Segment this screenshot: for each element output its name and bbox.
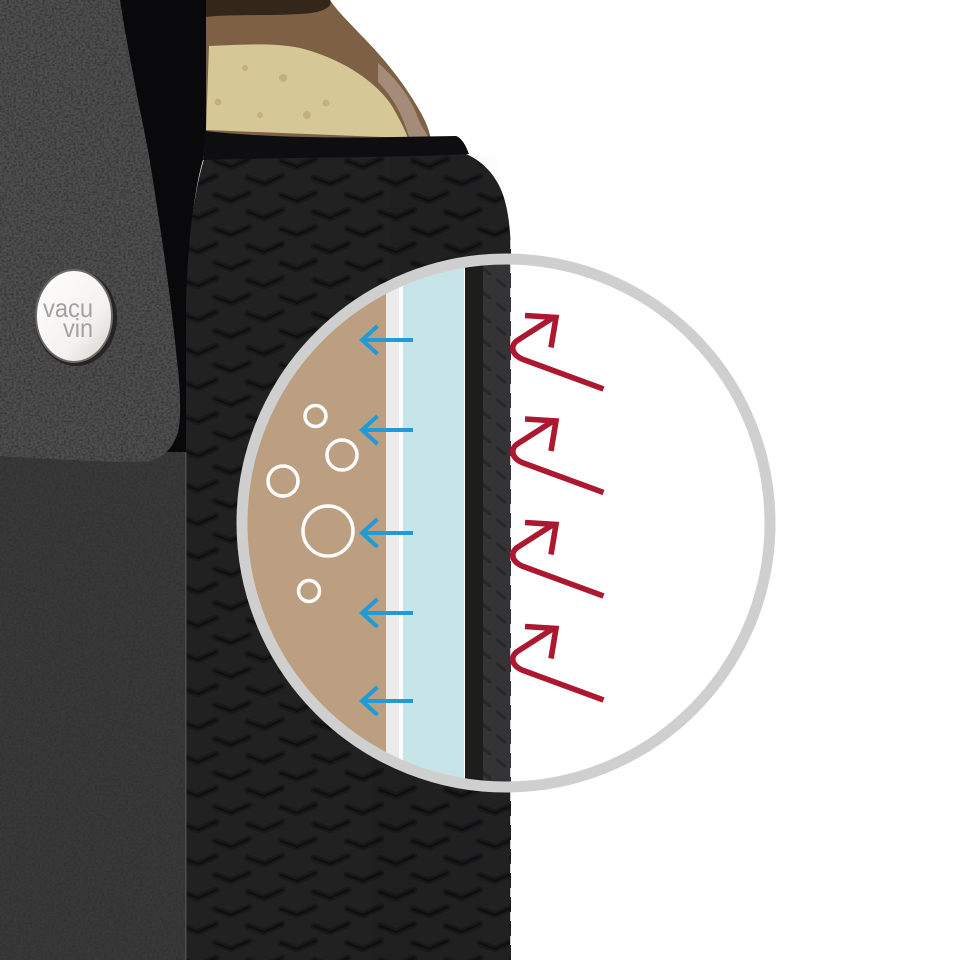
layer: glass	[386, 288, 399, 758]
rivet shadow	[35, 270, 117, 366]
layer: neoprene	[483, 250, 511, 810]
sleeve left shadow	[186, 156, 511, 960]
bubble 4	[303, 506, 353, 556]
bottle highlight	[378, 63, 428, 137]
bottle glass	[205, 0, 431, 140]
rivet logo: vin	[63, 313, 93, 343]
red arrow 1	[513, 316, 604, 389]
bubble 2	[327, 440, 357, 470]
blue arrow 5	[362, 687, 413, 715]
red arrow 2	[513, 419, 604, 492]
blue arrow 2	[362, 416, 413, 444]
lens white background	[399, 268, 465, 778]
magnifier lens	[230, 240, 790, 960]
bubble 5	[298, 580, 320, 602]
blue cold arrows	[362, 326, 413, 715]
leather flap	[0, 0, 190, 470]
lower bag panel	[0, 452, 186, 960]
red arrow 3	[513, 522, 604, 596]
blue arrow 1	[362, 326, 413, 354]
lens ring	[242, 259, 770, 787]
lens contents	[248, 264, 511, 782]
rivet text: vacu	[43, 293, 93, 323]
red arrow 4	[513, 626, 604, 700]
bottle liquid	[206, 44, 408, 138]
neoprene sleeve	[186, 131, 511, 960]
bubble 1	[305, 406, 326, 426]
red heat arrows	[513, 316, 604, 700]
blue arrow 3	[362, 519, 413, 547]
bubble 3	[268, 466, 298, 496]
rivet logo	[35, 270, 117, 366]
layer: cooling gel	[403, 250, 464, 810]
bottle neck shadow	[205, 0, 331, 17]
sleeve body	[186, 154, 511, 960]
blue arrow 4	[362, 599, 413, 627]
rivet disc	[36, 270, 112, 362]
sleeve scalloped edge	[510, 240, 513, 960]
layer: black lining	[465, 250, 483, 810]
dark inner strip	[118, 0, 206, 960]
bubbles	[268, 406, 357, 602]
bottle droplets	[214, 65, 330, 119]
bottle	[205, 0, 431, 140]
sleeve zip edge	[203, 131, 469, 160]
layer: wine	[248, 294, 386, 752]
